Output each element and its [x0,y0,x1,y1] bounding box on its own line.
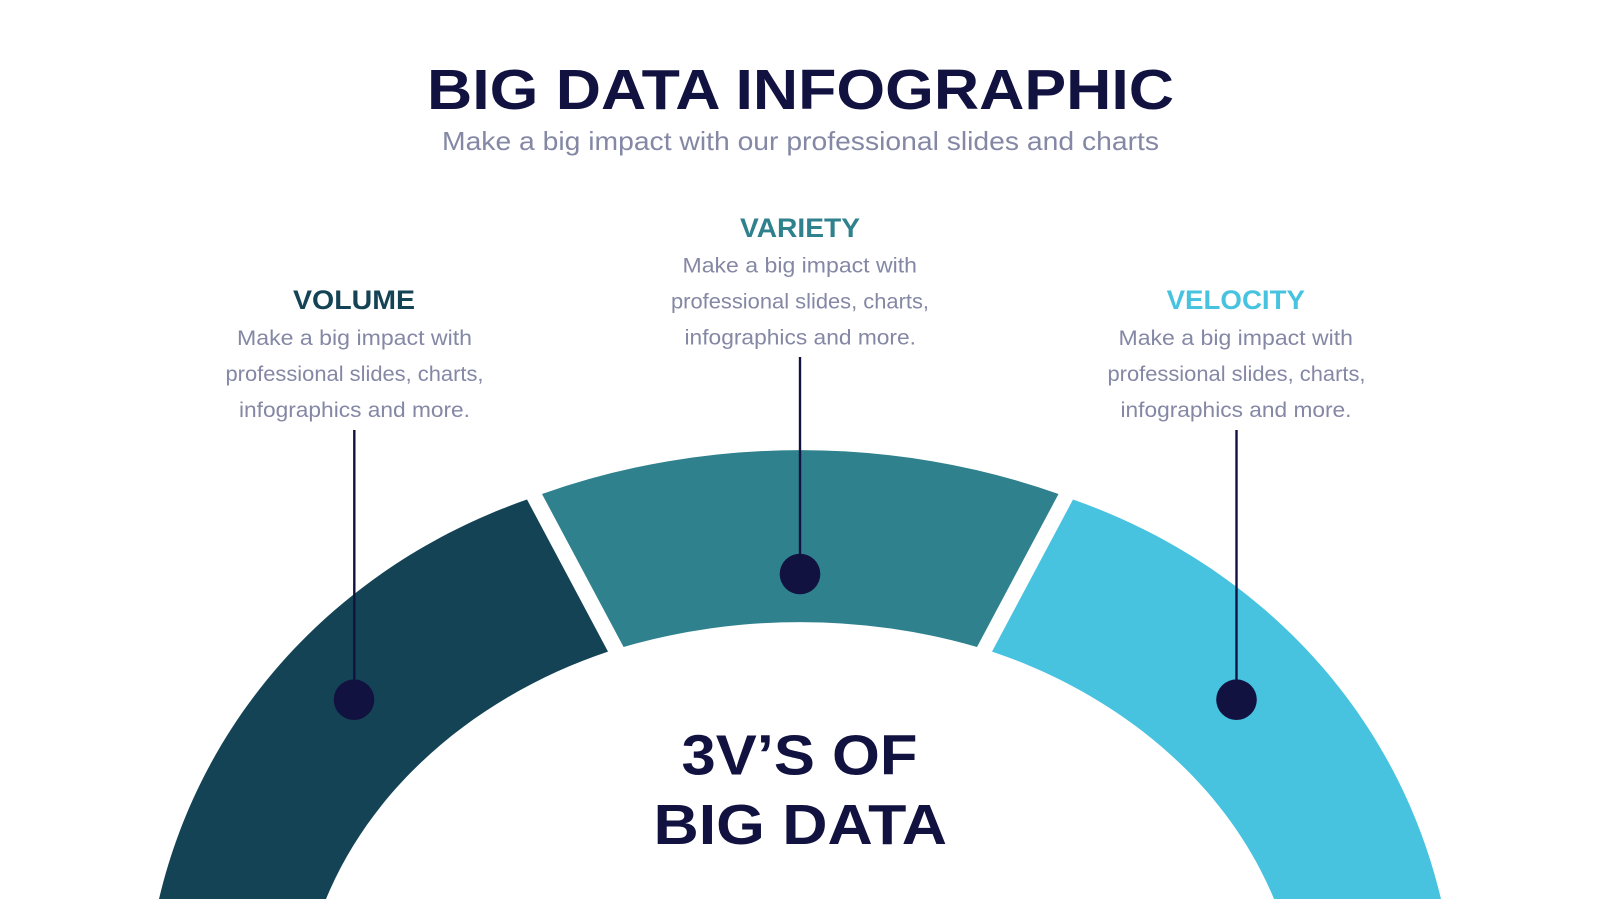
text block: velocity: Make a big impact with [1118,327,1353,350]
heading: variety: VARIETY [740,213,860,243]
center label [654,723,947,857]
subtitle: Make a big impact with our professional slides and charts [442,126,1159,156]
marker dot: variety [780,554,820,594]
leader line: variety [799,357,801,567]
text block: variety: Make a big impact with [682,254,917,278]
title: BIG DATA INFOGRAPHIC [427,58,1174,122]
center label: BIG DATA [654,793,947,857]
arc segment: variety [542,450,1058,647]
arc segment: volume [159,500,608,899]
text block: variety [671,254,929,350]
panel: volume [159,285,608,899]
panel: variety [542,213,1058,647]
text block: velocity: professional slides, charts, [1108,363,1366,386]
marker dot: volume [334,679,374,720]
text block: variety: professional slides, charts, [671,290,929,314]
center label: 3V’S OF [682,723,918,787]
text block: variety: infographics and more. [684,326,916,350]
text block: volume: Make a big impact with [237,327,472,350]
text block: volume: infographics and more. [239,399,470,422]
text block: volume: professional slides, charts, [226,363,484,386]
text block: velocity [1108,327,1366,422]
heading: velocity: VELOCITY [1167,285,1305,315]
arc segment: velocity [992,500,1441,899]
text block: velocity: infographics and more. [1120,399,1352,422]
text block: volume [226,327,484,422]
leader line: velocity [1235,430,1238,690]
panel: velocity [992,285,1441,899]
leader line: volume [353,430,356,690]
heading: volume: VOLUME [293,285,415,315]
marker dot: velocity [1216,679,1257,720]
